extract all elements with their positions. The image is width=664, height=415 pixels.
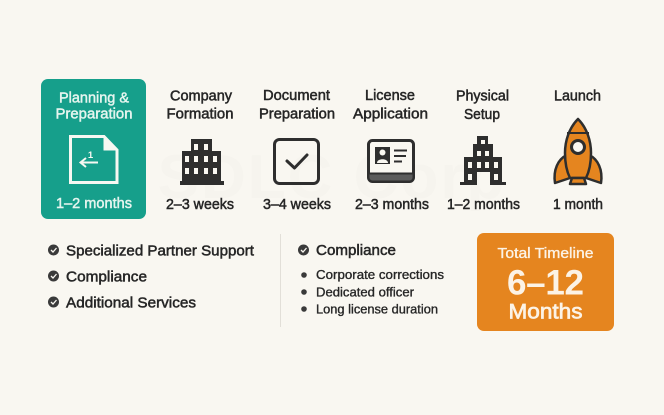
duration: 1-2 months: 1–2 months (447, 197, 520, 213)
heading: license application: License (365, 88, 415, 104)
list: services (48, 244, 254, 312)
item: corporate corrections: Corporate corrections (316, 267, 445, 282)
icon: document with arrow: 1 (88, 150, 94, 161)
callout unit: Months (508, 300, 582, 324)
callout label: Total Timeline (498, 246, 594, 262)
heading: planning and preparation (56, 90, 132, 122)
step: license application (353, 88, 429, 213)
duration: 2-3 months: 2–3 months (355, 197, 429, 213)
heading: document preparation: Document (263, 88, 330, 104)
step: launch (553, 88, 603, 213)
callout: total timeline (477, 233, 614, 331)
watermark: SDLC Corp (158, 143, 506, 212)
step: company formation (166, 88, 234, 213)
item: dedicated officer: Dedicated officer (316, 284, 415, 300)
heading: physical setup: Physical (456, 88, 509, 104)
icon: checkbox (274, 140, 318, 184)
heading: company formation: Formation (166, 106, 234, 122)
icon: office building (180, 139, 224, 185)
heading: license application (353, 88, 428, 122)
heading: planning and preparation: Preparation (56, 106, 132, 122)
heading: license application: Application (353, 106, 428, 122)
duration: 3-4 weeks: 3–4 weeks (263, 197, 331, 213)
list: compliance details (298, 243, 445, 316)
panel: planning and preparation (41, 79, 146, 219)
duration: 1 month: 1 month (553, 197, 603, 213)
item: compliance: Compliance (66, 270, 147, 286)
heading: launch: Launch (554, 88, 601, 104)
heading: company formation: Company (170, 88, 233, 104)
heading: planning and preparation: Planning & (59, 90, 129, 106)
step: document preparation (259, 88, 335, 213)
step: physical setup (447, 88, 520, 213)
icon: rocket (555, 119, 601, 184)
item: additional services: Additional Services (66, 296, 196, 312)
heading: compliance: Compliance (316, 243, 396, 259)
heading: document preparation: Preparation (259, 106, 335, 122)
heading: physical setup: Setup (464, 107, 500, 123)
icon: id card (368, 140, 414, 182)
heading: document preparation (259, 88, 335, 122)
item: specialized partner support: Specialized Partner Support (66, 244, 254, 260)
item: long license duration: Long license duration (316, 302, 438, 316)
duration: 1-2 months: 1–2 months (56, 196, 132, 212)
callout value: 6–12 (507, 264, 584, 302)
heading: physical setup (456, 88, 509, 123)
heading: company formation (166, 88, 234, 122)
icon: building with entrance (460, 136, 506, 185)
duration: 2-3 weeks: 2–3 weeks (166, 197, 234, 213)
